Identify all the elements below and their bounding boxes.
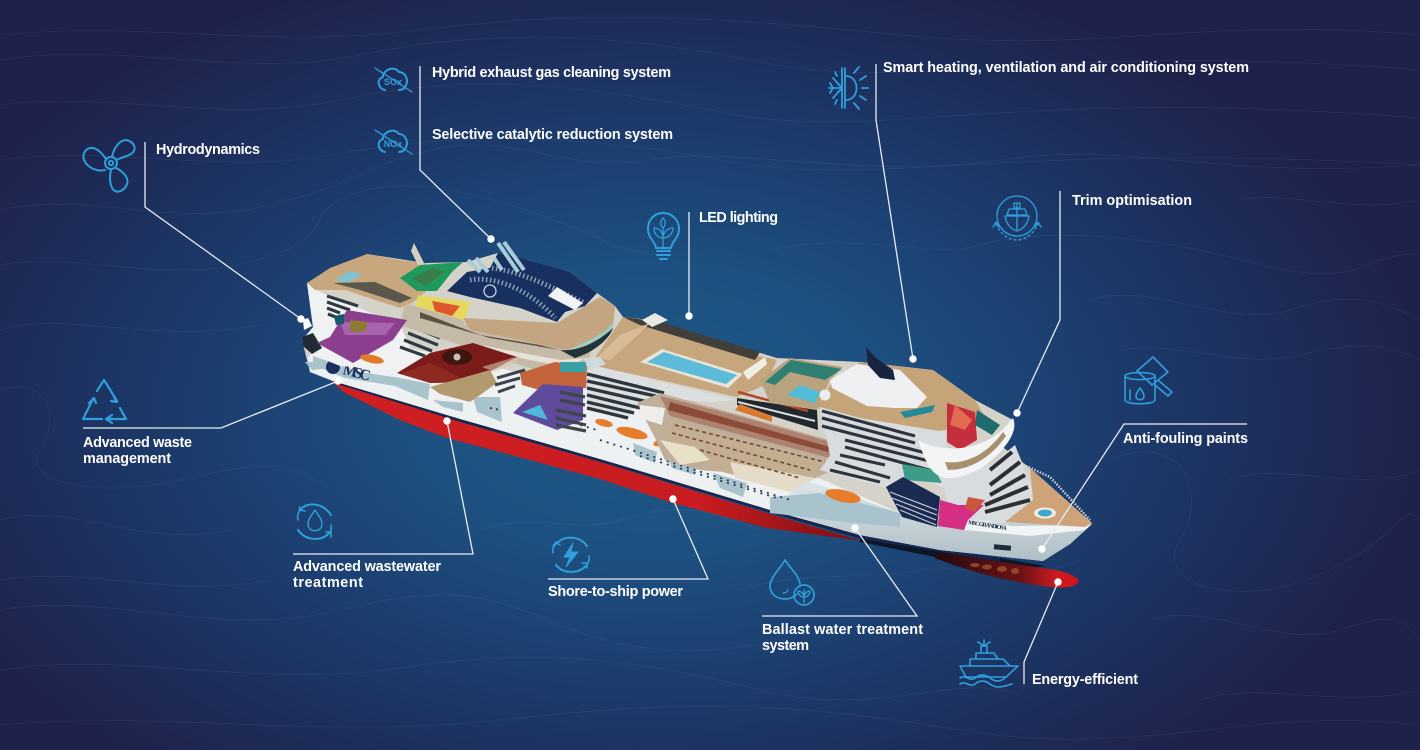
- bow deck: [1005, 468, 1092, 527]
- leader line: [762, 524, 917, 616]
- red lower hull: [331, 379, 862, 541]
- hull windows: [490, 408, 790, 500]
- leader line: [1024, 578, 1062, 684]
- ship base silhouette: [302, 253, 1092, 561]
- label: Energy-efficient: [1032, 672, 1138, 688]
- main white hull: [308, 330, 1092, 561]
- leader line: [1013, 191, 1060, 417]
- callout: smart HVAC: [829, 60, 1249, 363]
- leader line: [685, 212, 693, 320]
- main cabin block: [587, 367, 737, 418]
- label: Smart heating, ventilation and air conditioning system: [883, 60, 1249, 76]
- stern bridge wing: [302, 333, 322, 354]
- icon: water drop with leaf: [770, 560, 814, 605]
- leader line: [1038, 424, 1247, 553]
- label: Ballast water treatment: [762, 622, 923, 638]
- purple atrium: [317, 310, 407, 363]
- callout: advanced waste management: [83, 377, 342, 467]
- leader line: [420, 66, 495, 243]
- grey cabins center: [495, 370, 525, 392]
- MSC logo lettering: MSC: [341, 362, 372, 385]
- label: hybrid exhaust: Hybrid exhaust gas cleaning system: [432, 65, 671, 81]
- forward upper deck: [817, 362, 987, 435]
- bridge structure: [830, 364, 927, 408]
- label: Trim optimisation: [1072, 193, 1192, 209]
- icon: light bulb: [648, 213, 679, 259]
- leader line: [548, 495, 708, 579]
- white band under bow deck: [965, 520, 1090, 536]
- second pool area: [760, 358, 843, 410]
- ship cutaway illustration: [302, 242, 1092, 588]
- water park: [400, 262, 463, 291]
- central deck house: [737, 398, 818, 430]
- purple pool hall: [513, 384, 583, 430]
- promenade deck: [400, 303, 590, 380]
- funnels: [468, 242, 524, 272]
- forward cabin block: [820, 407, 1000, 495]
- callout: shore-to-ship power: [548, 495, 708, 600]
- icon: NOx cloud: [375, 130, 412, 154]
- leader line: [145, 142, 305, 323]
- callout: energy-efficient: [960, 578, 1138, 688]
- red floral suite: [947, 403, 977, 450]
- label continuation: treatment: [293, 575, 363, 591]
- aft upper deck: [307, 254, 440, 308]
- pool deck canopy: [743, 357, 767, 380]
- callout: anti-fouling paints: [1038, 357, 1248, 553]
- callout: ballast water treatment: [762, 524, 923, 654]
- callout: exhaust and catalytic systems: [375, 65, 673, 243]
- label: selective catalytic: Selective catalytic reduction system: [432, 127, 673, 143]
- bulbous bow: [935, 552, 1079, 588]
- callout: Hydrodynamics: [83, 140, 305, 323]
- mid cutaway decks: [637, 393, 840, 490]
- icon: paint can and brush: [1125, 357, 1172, 404]
- dark cabins lower: [556, 392, 586, 431]
- icon: lightning cycle: [553, 538, 589, 572]
- icon: SOx cloud: [375, 68, 412, 92]
- pink flower feature: [938, 500, 984, 530]
- icon: propeller: [83, 140, 135, 192]
- helicopter: [866, 347, 895, 380]
- side door: [994, 544, 1011, 551]
- forward stepped superstructure: [945, 445, 1035, 523]
- ship name: MSC GRANDIOSA: [968, 520, 1008, 532]
- light blue hull panels: [305, 356, 900, 527]
- label: Anti-fouling paints: [1123, 431, 1248, 447]
- bow hull plating: [780, 478, 1092, 561]
- label: Advanced waste: [83, 435, 192, 451]
- icon: ship on waves: [960, 640, 1018, 687]
- main pool: [640, 349, 743, 388]
- stern white superstructure: [303, 283, 420, 370]
- callout: LED lighting: [648, 210, 778, 320]
- icon: ship in circle: [993, 196, 1041, 240]
- ring deck below dome: [463, 297, 615, 350]
- label continuation: management: [83, 451, 171, 467]
- lifeboat aft: [359, 353, 385, 365]
- icon: SOx cloud: SOx: [384, 77, 402, 87]
- icon: recycling triangle: [83, 380, 126, 423]
- leader line: [83, 377, 342, 428]
- leader line: [293, 417, 473, 554]
- callout: trim optimisation: [993, 191, 1192, 417]
- icon: water cycle: [298, 504, 331, 539]
- theatre lower foyer: [430, 370, 497, 402]
- leader line: [876, 64, 917, 363]
- label: Advanced wastewater: [293, 559, 441, 575]
- aft cabin rows: [327, 296, 440, 356]
- navy waterline stripe: [333, 381, 1000, 560]
- orange deck area: [520, 362, 587, 390]
- callout: advanced wastewater treatment: [293, 417, 473, 591]
- central theatre: [397, 343, 517, 383]
- icon: sun and snowflake: [829, 67, 868, 109]
- label: Hydrodynamics: [156, 142, 260, 158]
- MSC logo lettering: [326, 360, 372, 385]
- open-air theatre seats: [886, 477, 940, 527]
- stern railing detail: [303, 318, 312, 330]
- label: LED lighting: [699, 210, 778, 226]
- play area: [415, 295, 470, 320]
- dome: [447, 253, 597, 322]
- hull shadow: [860, 536, 1045, 572]
- crescent bridge wing: [918, 418, 1014, 478]
- lifeboats: [594, 417, 862, 506]
- label: Shore-to-ship power: [548, 584, 683, 600]
- mid deck tan: [590, 317, 777, 397]
- icon: NOx cloud: NOx: [384, 139, 402, 149]
- label continuation: system: [762, 638, 809, 654]
